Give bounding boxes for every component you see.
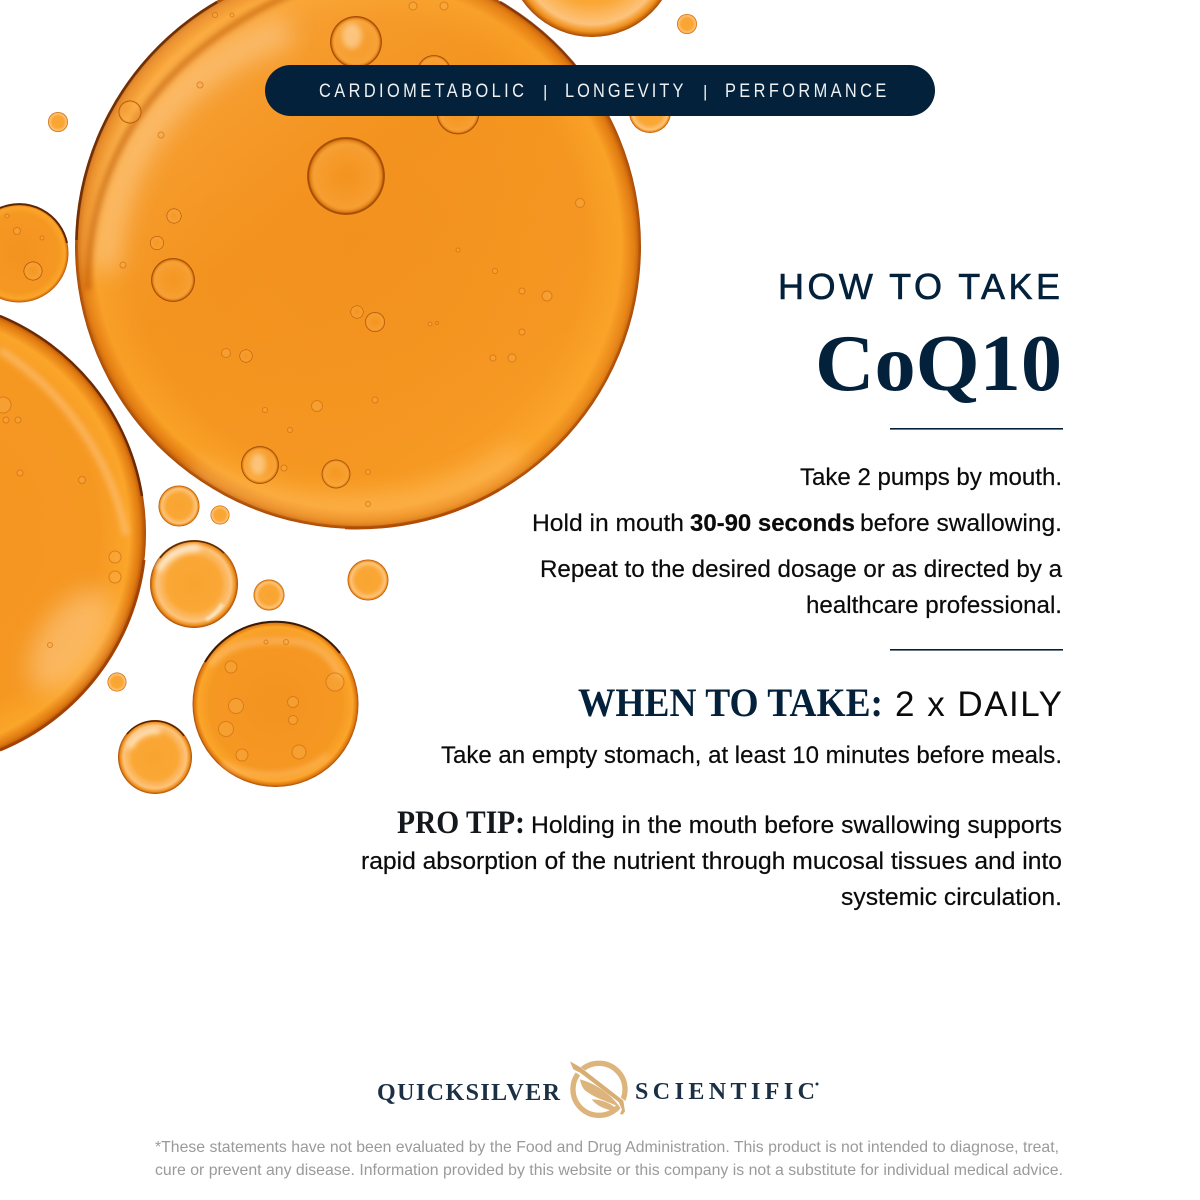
logo emblem [570,1061,627,1115]
top pill banner [265,65,935,116]
logo: SCIENTIFIC [635,1079,815,1105]
banner labels: CARDIOMETABOLIC [319,80,524,101]
banner labels: | [703,82,707,101]
dosing instructions [532,464,1063,619]
dosing instructions: before swallowing. [860,510,1062,537]
bottom large bubble [192,621,358,787]
small droplets [48,14,697,794]
disclaimer: cure or prevent any disease. Information provided by this website or this company is not a substitute for individual medical advice. [155,1162,1063,1179]
disclaimer [155,1139,1063,1179]
when to take heading [578,680,1062,725]
when to take heading: WHEN TO TAKE: [578,680,883,725]
pro tip [361,805,1062,911]
dosing instructions: Hold in mouth [532,510,684,537]
banner labels [319,80,886,101]
bubbles illustration [0,0,697,794]
left small bubble [0,204,68,302]
top right bubble [507,0,677,37]
logo: QUICKSILVER [377,1080,561,1106]
banner labels: | [543,82,547,101]
pro tip: PRO TIP: [397,805,525,841]
inner bubbles of main bubble [118,2,584,506]
dosing instructions: Take 2 pumps by mouth. [800,464,1062,491]
left large bubble [0,297,146,769]
when to take heading: 2 x DAILY [895,685,1062,724]
pro tip: rapid absorption of the nutrient through mucosal tissues and into [361,848,1062,875]
logo [377,1061,818,1115]
dosing instructions: Repeat to the desired dosage or as directed by a [540,556,1063,583]
dosing instructions: 30-90 seconds [690,510,855,537]
pro tip: systemic circulation. [841,884,1062,911]
title: CoQ10: CoQ10 [815,320,1062,408]
disclaimer: *These statements have not been evaluated by the Food and Drug Administration. This product is not intended to diagnose, treat, [155,1139,1059,1156]
dosing instructions: healthcare professional. [806,592,1062,619]
title: how to take: HOW TO TAKE [778,266,1060,307]
banner labels: PERFORMANCE [725,80,886,101]
banner labels: LONGEVITY [565,80,683,101]
when to take text: Take an empty stomach, at least 10 minutes before meals. [441,742,1062,769]
main oil bubble [75,0,641,529]
pro tip: Holding in the mouth before swallowing supports [531,812,1062,839]
